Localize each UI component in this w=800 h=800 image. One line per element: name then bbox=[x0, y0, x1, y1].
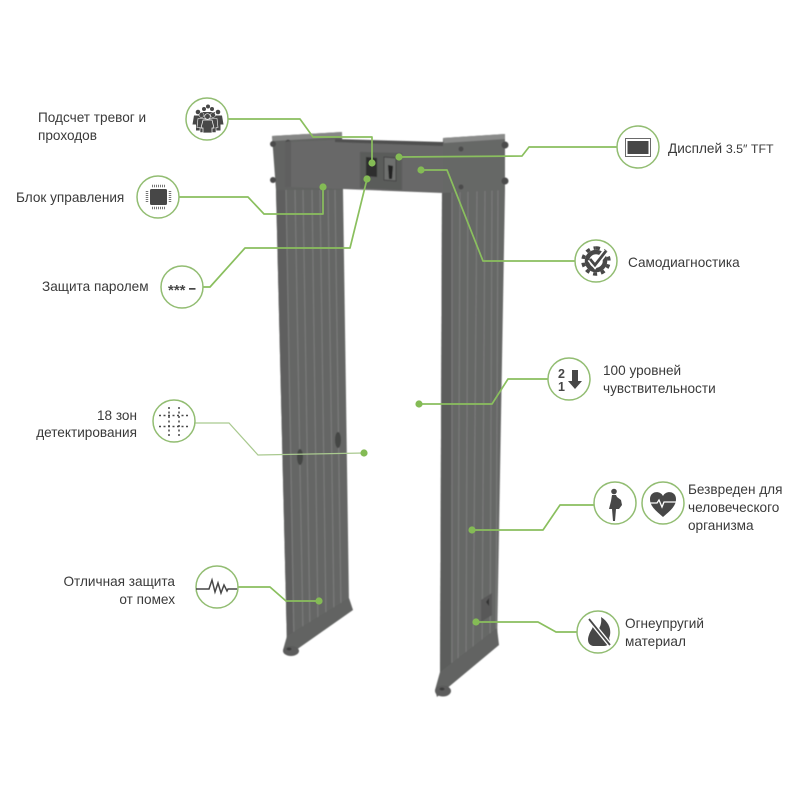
callout: password protection bbox=[42, 175, 371, 308]
icon: group of people bbox=[186, 98, 228, 140]
callout: detection zones bbox=[36, 400, 368, 457]
callout: fire-resistant material bbox=[472, 611, 704, 653]
anchor dot: display bbox=[395, 153, 403, 161]
callout: alarm and pass count bbox=[38, 98, 376, 167]
label: interference: от помех bbox=[119, 592, 175, 607]
leader line: interference bbox=[238, 587, 319, 601]
left top cap bbox=[270, 132, 343, 190]
label: diagnostics: Самодиагностика bbox=[628, 255, 740, 270]
label: safety: Безвреден для bbox=[688, 482, 782, 497]
walk-through metal detector gate bbox=[270, 132, 508, 697]
anchor dot: safety bbox=[468, 526, 476, 534]
leader line: password bbox=[203, 179, 367, 287]
label: interference: Отличная защита bbox=[63, 574, 175, 589]
anchor dot: fire resistance bbox=[472, 618, 480, 626]
label: zones: 18 зон bbox=[97, 408, 137, 423]
label: display: Дисплей 3.5″ TFT bbox=[668, 141, 774, 156]
icon: numbered levels with arrow bbox=[548, 358, 590, 400]
crossbar bbox=[285, 139, 443, 193]
icon: gear with check bbox=[575, 240, 617, 282]
icon: numbered levels with arrow: 1 bbox=[558, 380, 565, 394]
anchor dot: diagnostics bbox=[417, 166, 425, 174]
leader line: zones bbox=[195, 423, 364, 455]
leader line: display bbox=[399, 147, 617, 157]
label: fire resistance: Огнеупругий bbox=[625, 616, 704, 631]
leader line: sensitivity bbox=[419, 379, 548, 404]
label: alarm count: проходов bbox=[38, 128, 97, 143]
leader line: fire resistance bbox=[476, 622, 577, 632]
callout: interference protection bbox=[63, 566, 323, 608]
icon: noise wave bbox=[196, 566, 238, 608]
leader line: control unit bbox=[179, 187, 323, 214]
label: sensitivity: 100 уровней bbox=[603, 363, 681, 378]
right top cap bbox=[442, 134, 508, 193]
icon: pregnant woman bbox=[594, 482, 636, 524]
right pillar bbox=[435, 190, 505, 697]
label: password: Защита паролем bbox=[42, 279, 149, 294]
anchor dot: password bbox=[363, 175, 371, 183]
icon: crossed-out flame bbox=[577, 611, 619, 653]
callout: safe for human body bbox=[468, 482, 782, 534]
label: sensitivity: чувствительности bbox=[603, 381, 716, 396]
icon: password mask bbox=[161, 266, 203, 308]
icon: numbered levels with arrow: 2 bbox=[558, 367, 565, 381]
label: fire resistance: материал bbox=[625, 634, 686, 649]
anchor dot: sensitivity bbox=[415, 400, 423, 408]
anchor dot: interference bbox=[315, 597, 323, 605]
callout: sensitivity levels bbox=[415, 358, 716, 408]
icon: microchip bbox=[137, 176, 179, 218]
callout: TFT display bbox=[395, 126, 774, 168]
callout: self-diagnostics bbox=[417, 166, 740, 282]
anchor dot: alarm count bbox=[368, 159, 376, 167]
label: safety: организма bbox=[688, 518, 754, 533]
leader line: alarm count bbox=[228, 119, 372, 163]
callout: control unit bbox=[16, 176, 327, 218]
icon: zone grid bbox=[153, 400, 195, 442]
icon: heart with pulse bbox=[642, 482, 684, 524]
label: safety: человеческого bbox=[688, 500, 779, 515]
leader line: safety bbox=[472, 505, 594, 530]
leader line: diagnostics bbox=[421, 170, 575, 261]
control panel with display and keypad bbox=[360, 152, 402, 190]
label: alarm count: Подсчет тревог и bbox=[38, 110, 146, 125]
label: zones: детектирования bbox=[36, 425, 137, 440]
icon: screen bbox=[617, 126, 659, 168]
anchor dot: zones bbox=[360, 449, 368, 457]
anchor dot: control unit bbox=[319, 183, 327, 191]
left pillar bbox=[276, 190, 353, 656]
label: control unit: Блок управления bbox=[16, 190, 124, 205]
icon: password mask: *** bbox=[168, 282, 186, 299]
